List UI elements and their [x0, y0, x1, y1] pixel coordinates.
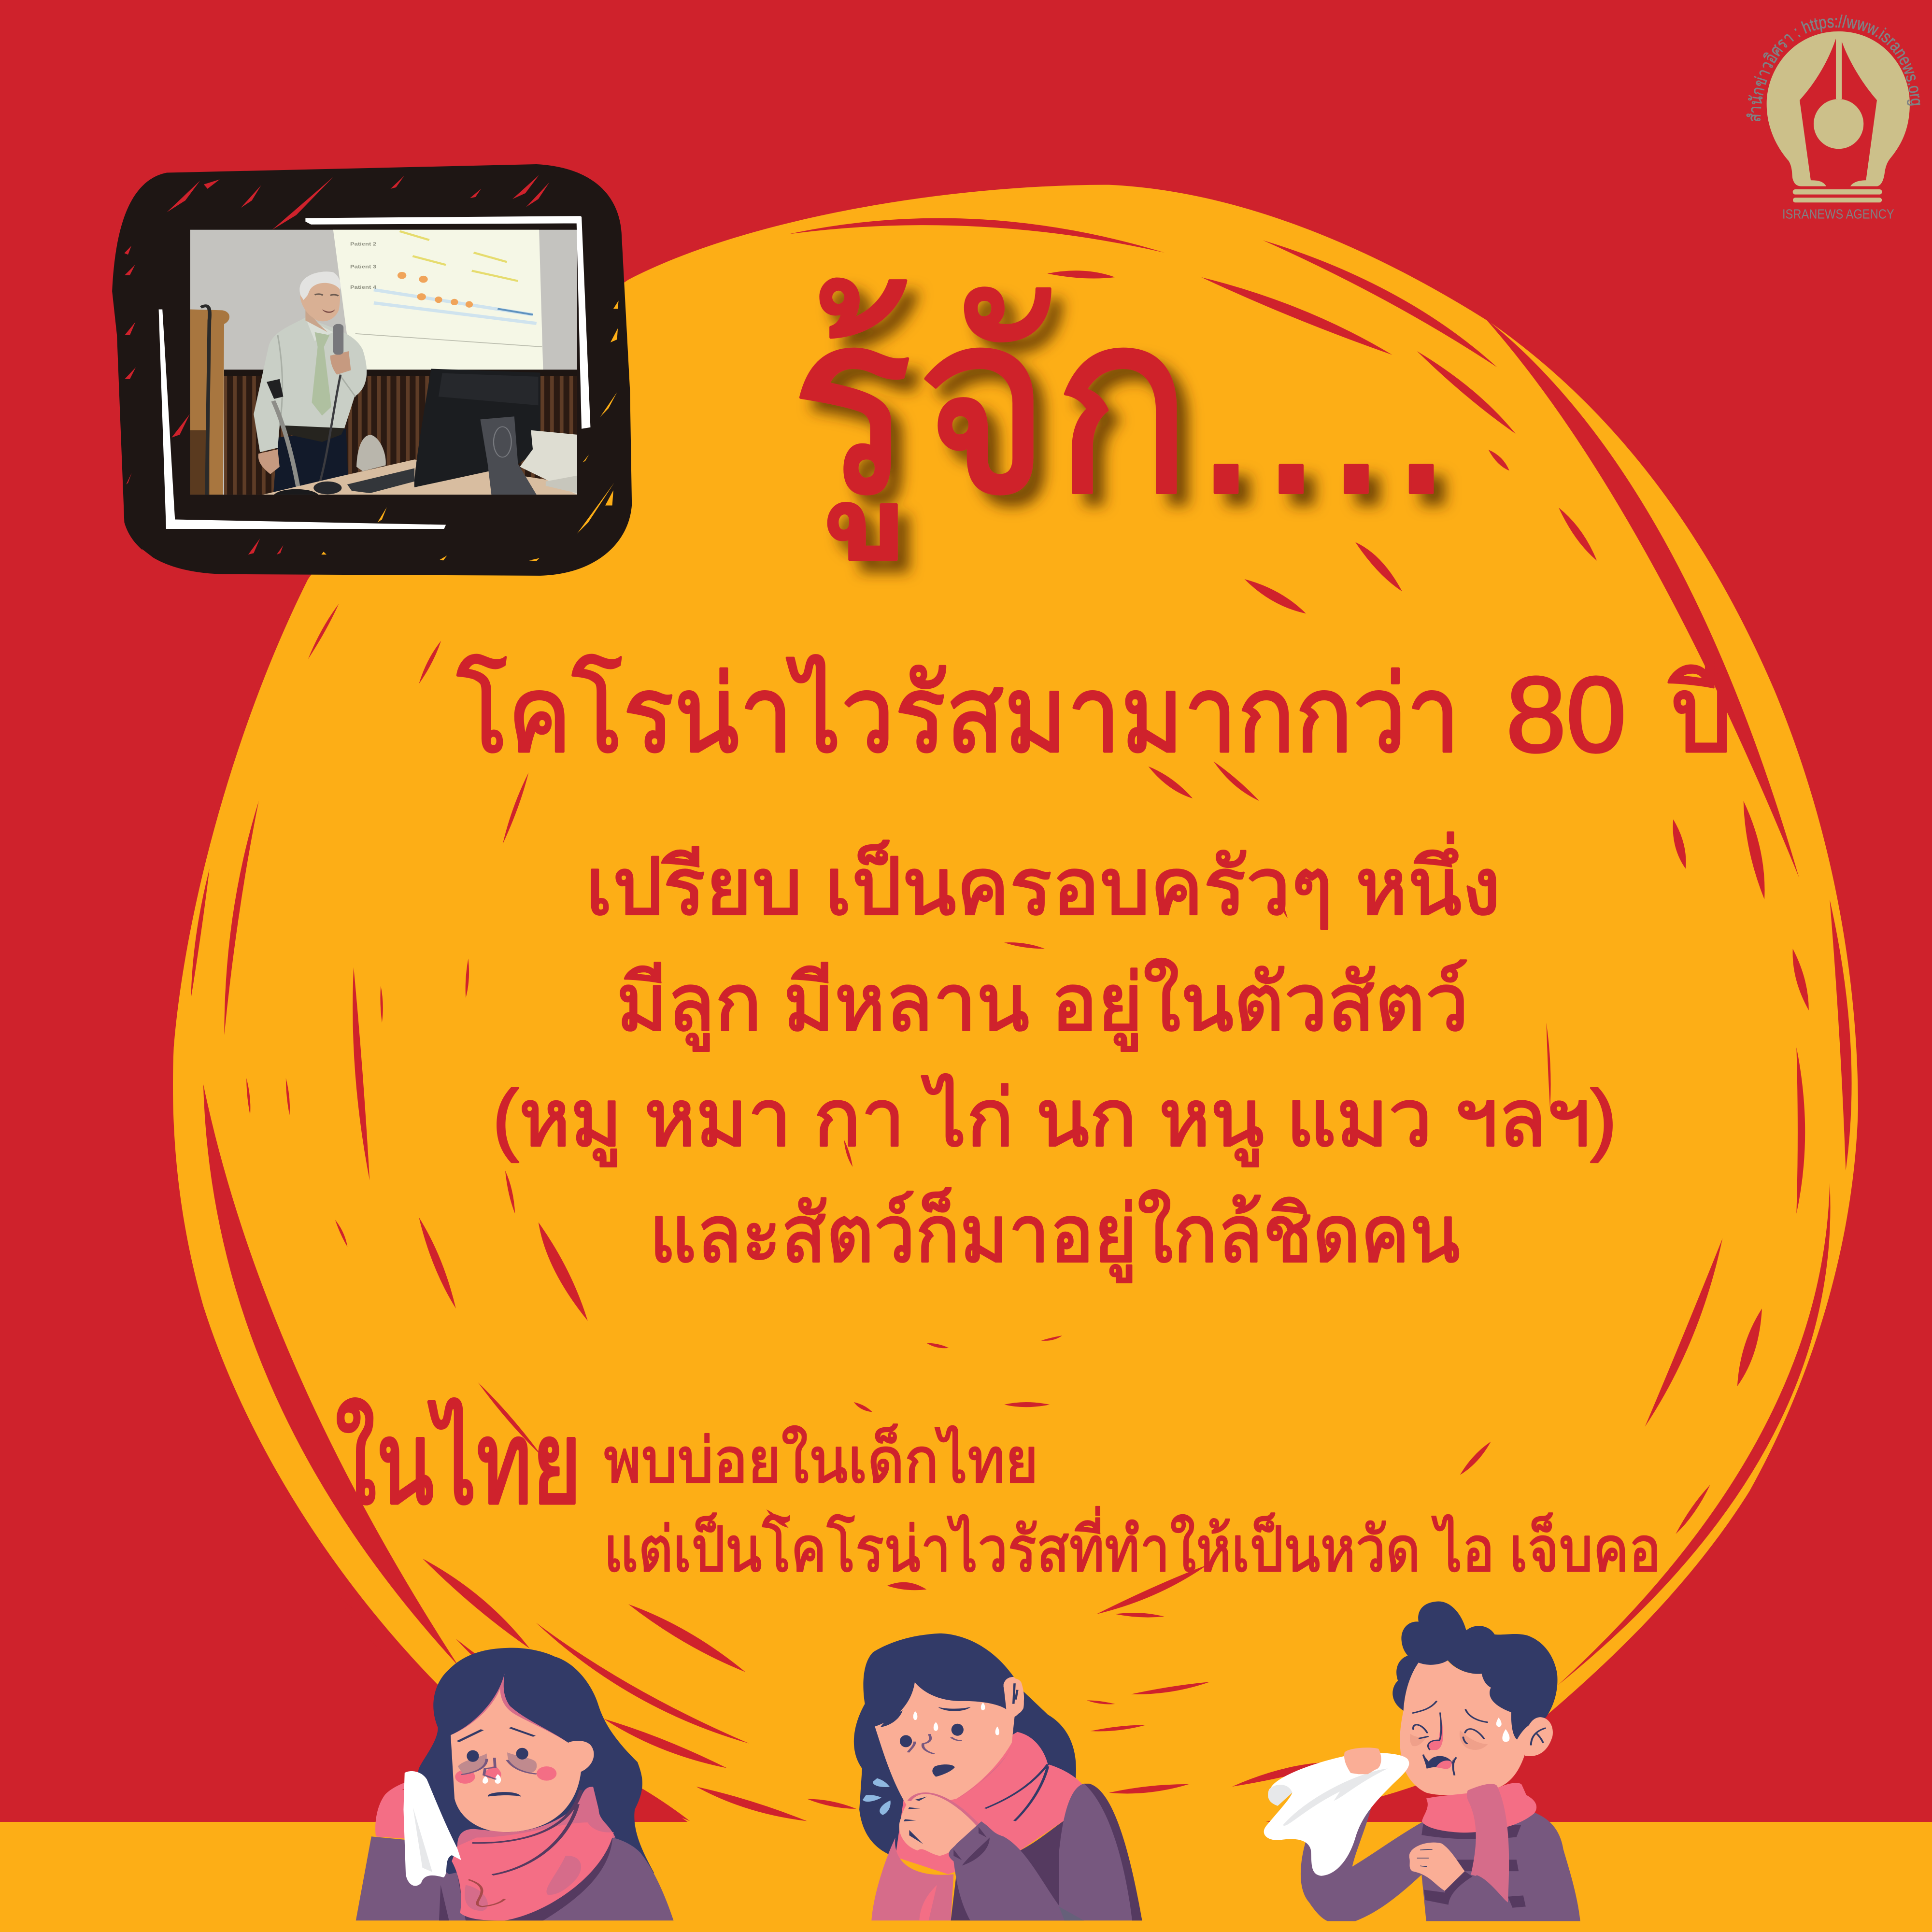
subtitle: 80: [1506, 655, 1626, 775]
woman with tissue: [356, 1648, 674, 1920]
yellow frame scratches: [321, 300, 619, 561]
logo agency name: ISRANEWS AGENCY: [1782, 207, 1894, 222]
man sneezing: [1264, 1602, 1580, 1921]
in Thailand text: [604, 1424, 1661, 1585]
scribbled black frame: [112, 164, 632, 576]
photograph: [190, 230, 577, 495]
frame scratches: [124, 175, 549, 559]
subtitle: ปี: [1668, 655, 1732, 775]
white brush strokes: [159, 216, 590, 529]
bottom yellow band: [0, 1822, 1932, 1932]
body text block: และสัตว์ก็มาอยู่ใกล้ชิดคน: [649, 1188, 1460, 1282]
photograph: Patient 2: [350, 242, 377, 247]
in Thailand text: พบบ่อยในเด็กไทย: [604, 1424, 1038, 1496]
subtitle: โคโรน่าไวรัสมามากกว่า: [456, 654, 1460, 775]
logo base lines: [1793, 189, 1882, 202]
blob scratches: [191, 218, 1852, 1821]
title: รู้จัก....: [789, 261, 1454, 561]
yellow scribbled circle: [173, 185, 1858, 1823]
body text block: มีลูก มีหลาน อยู่ในตัวสัตว์: [616, 958, 1469, 1051]
logo: [1747, 14, 1920, 222]
photograph: Patient 4: [350, 284, 377, 290]
logo curved url: สำนักข่าวอิศรา : https://www.isranews.org: [1747, 14, 1920, 122]
nib hole: [1814, 99, 1863, 149]
characters: two women: [356, 1634, 1142, 1920]
body text block: เปรียบ เป็นครอบครัวๆ หนึ่ง: [585, 832, 1501, 931]
in Thailand heading: ในไทย: [335, 1398, 582, 1528]
in Thailand text: แต่เป็นโคโรน่าไวรัสที่ทำให้เป็นหวัด ไอ เจ็บคอ: [604, 1506, 1661, 1585]
photo panel: [112, 164, 632, 576]
body text block: [493, 832, 1617, 1282]
woman coughing: [854, 1634, 1142, 1920]
photograph: Patient 3: [350, 264, 377, 270]
body text block: (หมู หมา กา ไก่ นก หนู แมว ฯลฯ): [493, 1074, 1617, 1166]
logo bulb and pen nib: [1767, 31, 1910, 186]
